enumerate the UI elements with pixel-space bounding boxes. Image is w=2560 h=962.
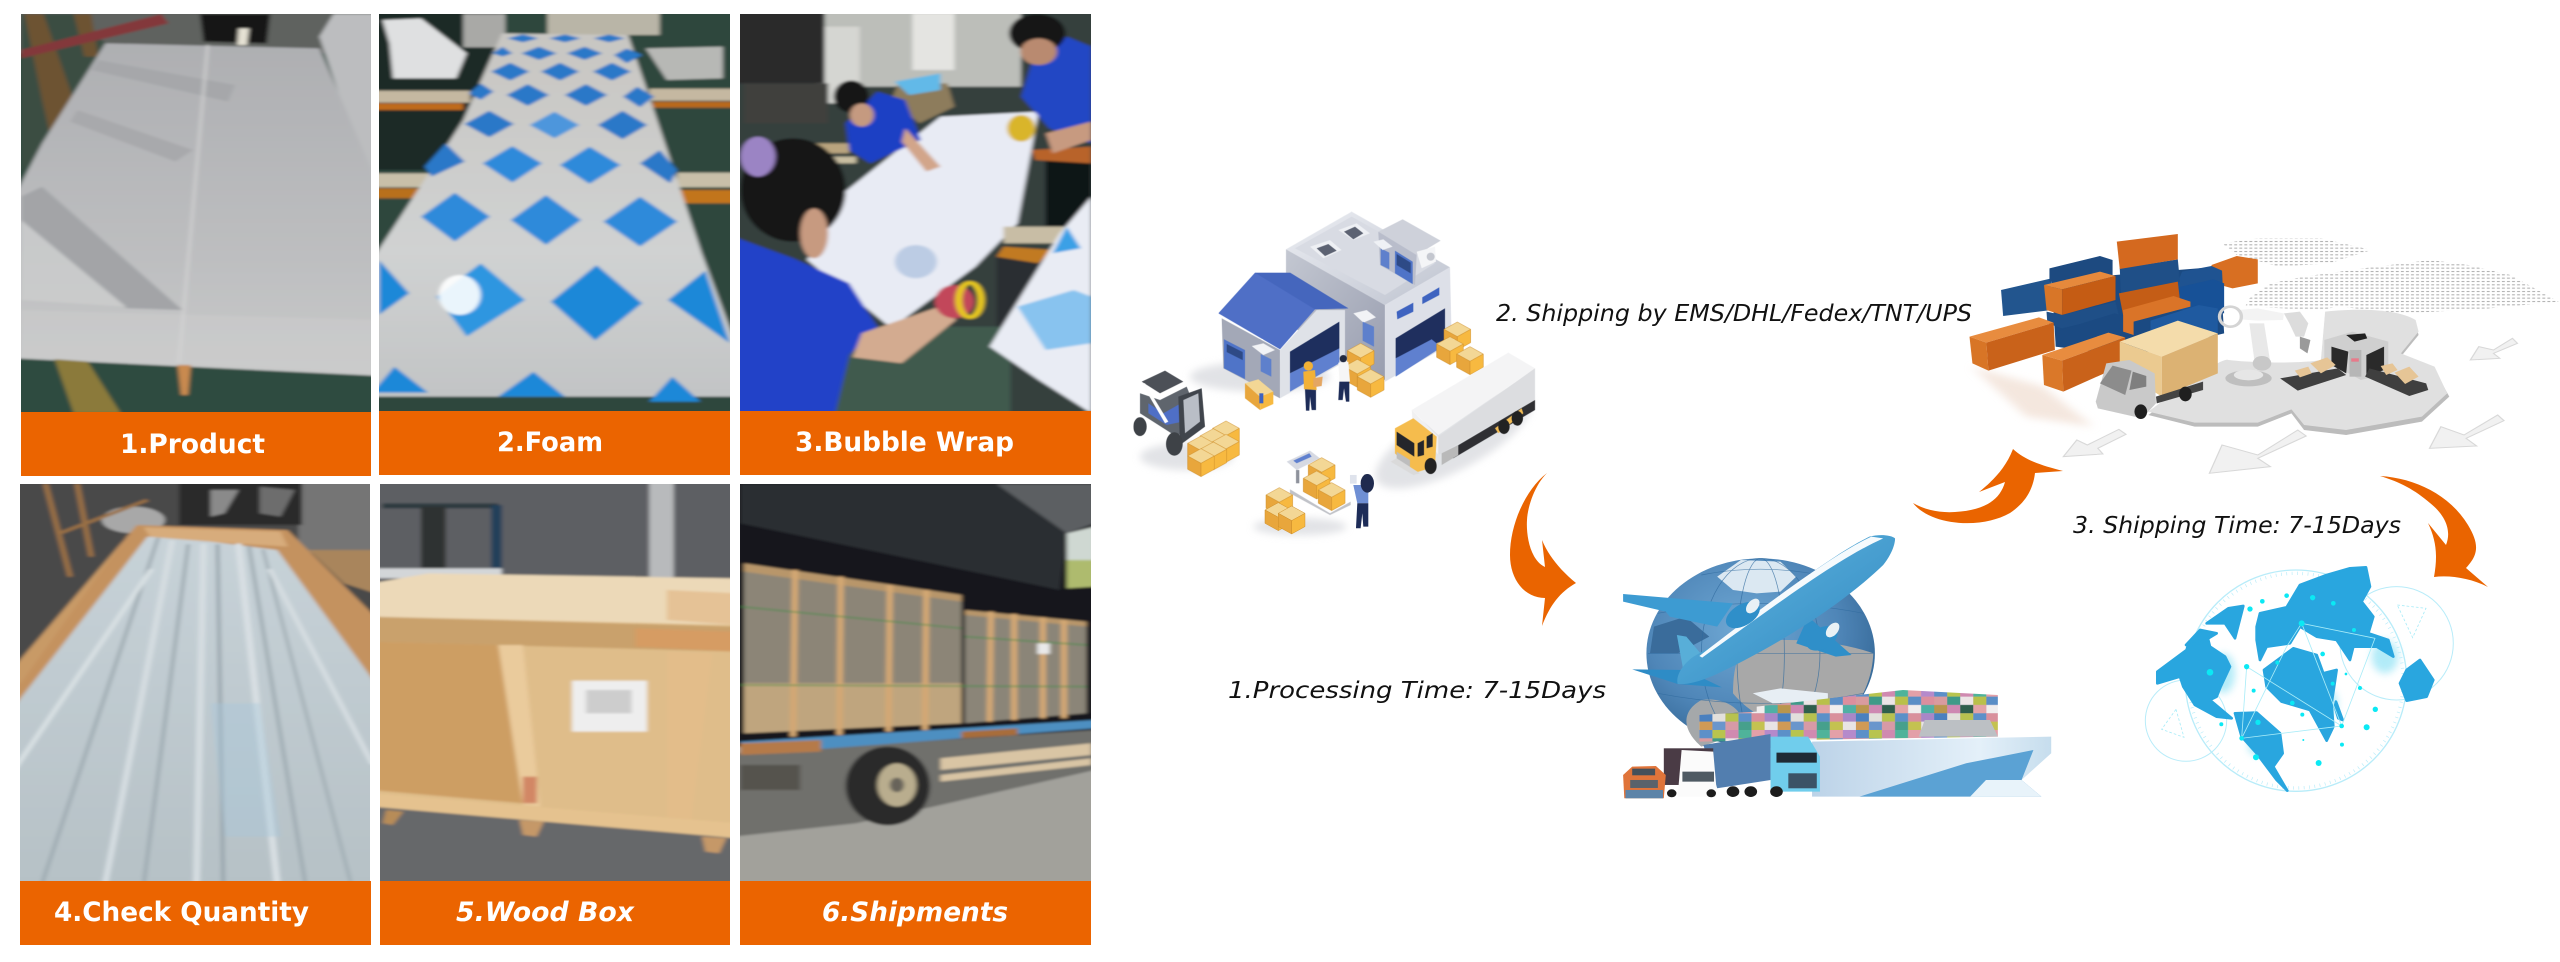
label text: 3.Bubble Wrap: [795, 427, 1014, 458]
cyan nodes: [2207, 593, 2378, 766]
compass rings: [2145, 570, 2453, 791]
label bar: [380, 881, 730, 945]
photo: sheet with blue foam labels: [372, 10, 737, 415]
caption: shipping carriers: 2. Shipping by EMS/DHL/Fedex/TNT/UPS: [1496, 301, 1972, 327]
panel: 4.Check Quantity: [14, 480, 379, 945]
icon: curved arrow warehouse to transport: [1510, 473, 1576, 626]
panel: 1.Product: [14, 10, 379, 476]
white truck: [1664, 748, 1717, 797]
forklift: [1133, 371, 1205, 456]
caption: shipping time: 3. Shipping Time: 7-15Days: [2073, 513, 2401, 539]
small blue-roof building: [1218, 273, 1348, 398]
photo: corrugated sheet on factory floor: [14, 10, 379, 415]
delivery truck: [1391, 353, 1535, 475]
blue lorry: [1703, 734, 1820, 797]
illustration: globe, plane, cargo ship and trucks: [1623, 535, 2051, 798]
ground shadows: [1140, 362, 1544, 535]
panel: 2.Foam: [372, 10, 737, 475]
illustration: containers, truck, robot arm and map: [1969, 234, 2559, 473]
label bar: [21, 412, 371, 476]
dotted world map: [2222, 238, 2559, 313]
glow: [2212, 640, 2398, 755]
icon: curved arrow transport to logistics: [1913, 449, 2063, 523]
network lines: [2162, 605, 2426, 738]
illustration: blue world map: [2145, 567, 2453, 791]
orange car: [1623, 766, 1666, 798]
continents: [2157, 567, 2433, 791]
photo: truck loaded with crates: [733, 480, 1098, 885]
main building: [1286, 212, 1452, 382]
airplane: [1623, 535, 1895, 687]
globe: [1646, 558, 1875, 748]
label text: 6.Shipments: [822, 897, 1008, 928]
label bar: [740, 881, 1091, 945]
photo: workers wrapping sheet: [733, 10, 1098, 415]
panel: 3.Bubble Wrap: [733, 10, 1098, 475]
illustration: warehouse with forklift, truck and workers: [1133, 212, 1544, 535]
robot arm: [2219, 307, 2310, 386]
gray map of China: [2148, 310, 2449, 435]
label bar: [20, 881, 371, 945]
icon: curved arrow logistics to world: [2380, 476, 2488, 587]
cargo ship: [1699, 688, 2051, 797]
crates: forklift pallet: [1188, 421, 1239, 477]
panel: 6.Shipments: [733, 480, 1098, 945]
caption: processing time: 1.Processing Time: 7-15Days: [1228, 678, 1606, 704]
panel: 5.Wood Box: [372, 480, 737, 945]
photo: wooden crate: [372, 480, 737, 885]
photo: sheets inside wooden crate: [14, 480, 379, 885]
white direction arrows on ground: [2063, 338, 2517, 473]
containers: [1969, 234, 2258, 392]
workers at door: [1303, 355, 1350, 411]
label bar: [379, 411, 730, 475]
generator box: [1245, 379, 1273, 410]
label text: 5.Wood Box: [456, 897, 636, 928]
conveyor gate with parcels: [2280, 332, 2428, 396]
label bar: [740, 411, 1091, 475]
label text: 1.Product: [120, 429, 265, 460]
truck with cardboard load: [2096, 321, 2218, 419]
crates: building: [1344, 322, 1483, 397]
label text: 4.Check Quantity: [54, 897, 309, 928]
reflection shadow: [1972, 367, 2094, 427]
label text: 2.Foam: [497, 427, 603, 458]
scale with parcels and clerk: [1265, 451, 1374, 534]
